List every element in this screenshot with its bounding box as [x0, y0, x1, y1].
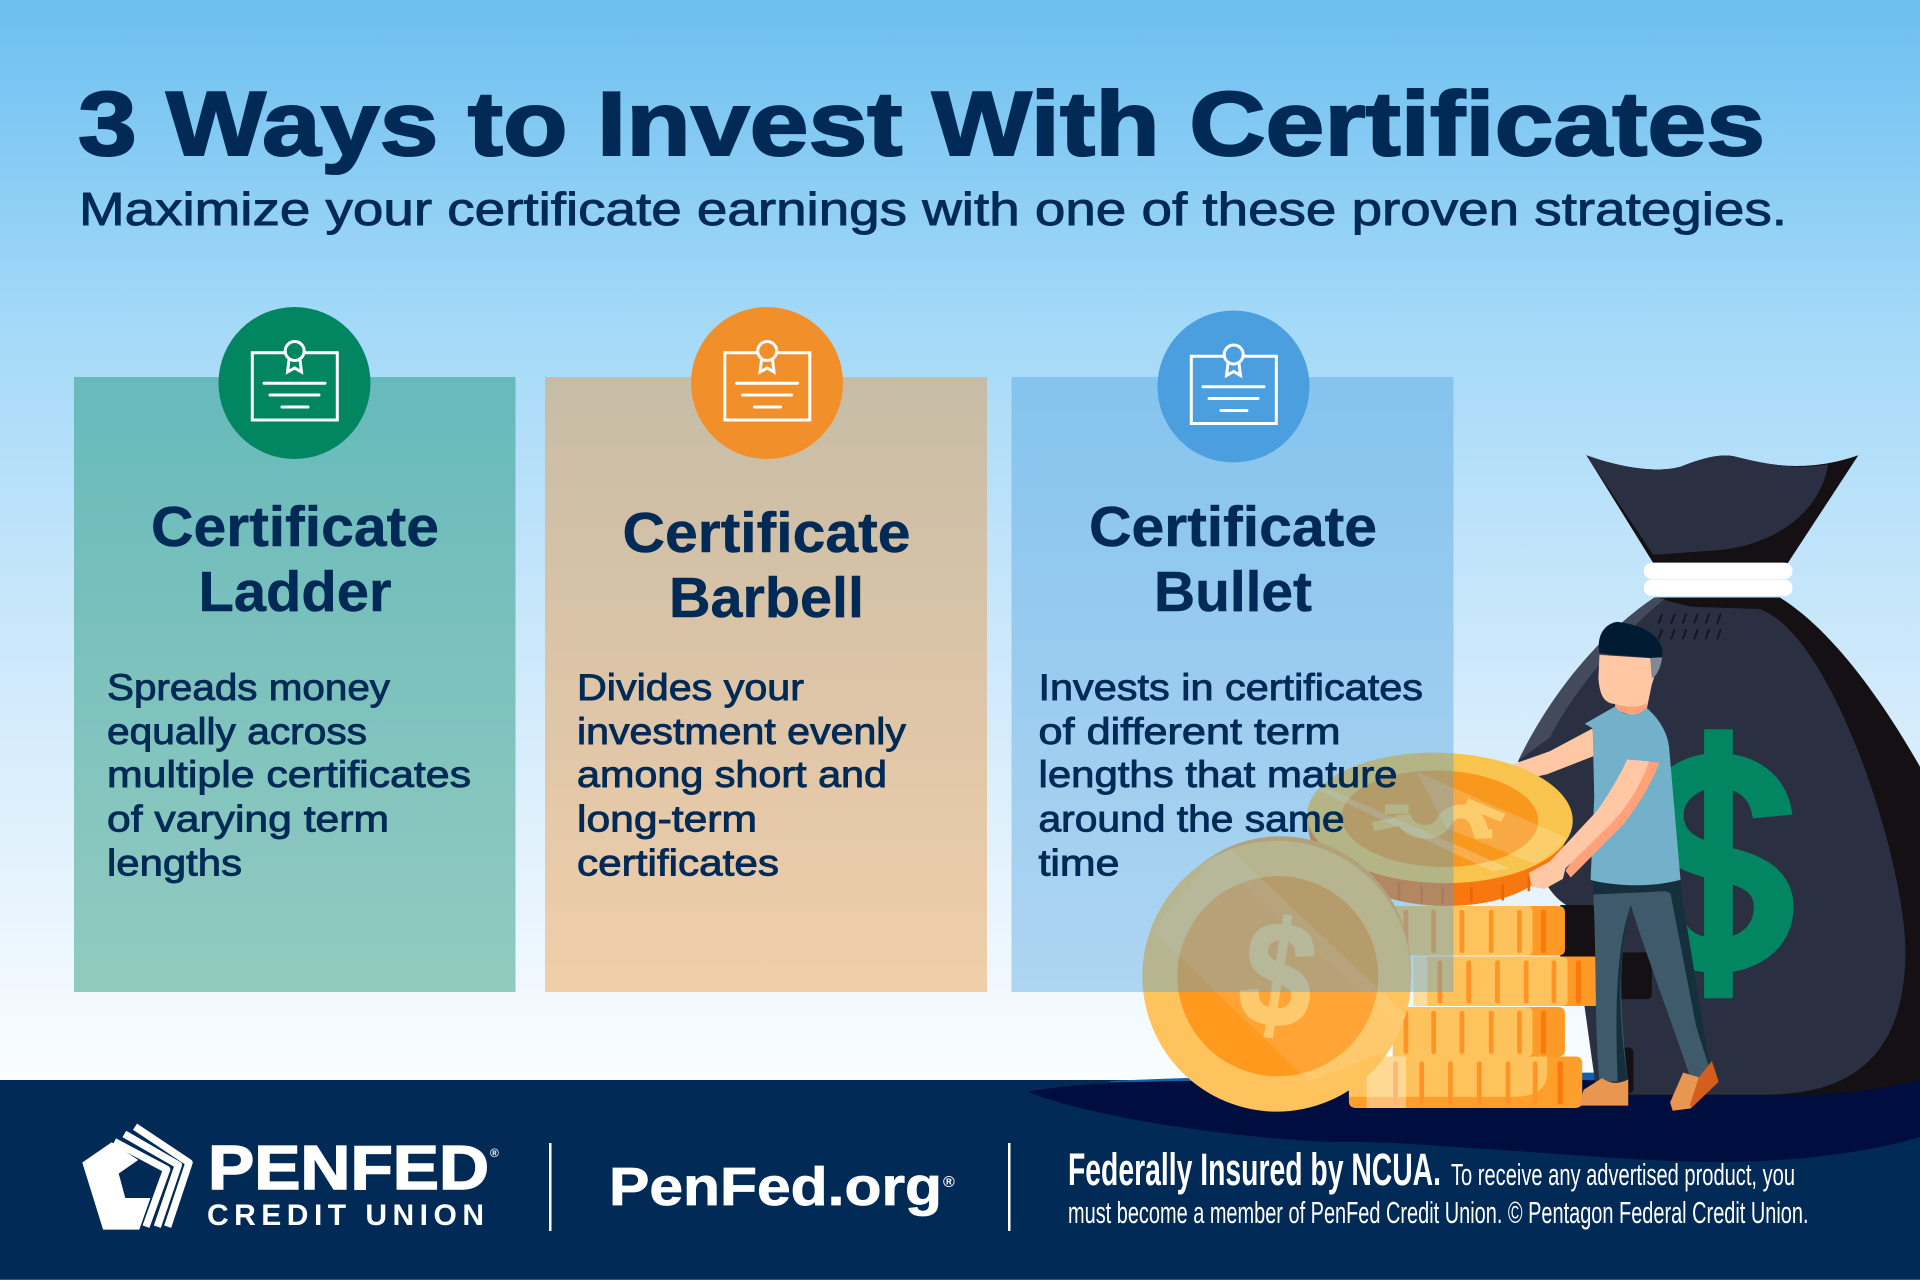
- heading: Certificate: [151, 495, 439, 559]
- panel: certificate bullet: [1012, 310, 1454, 992]
- disclosure text: [1068, 1144, 1808, 1230]
- disclosure text: Federally Insured by NCUA.: [1068, 1144, 1441, 1195]
- description: multiple certificates: [107, 754, 471, 795]
- panel: certificate ladder: [74, 307, 516, 992]
- description: time: [1038, 842, 1120, 884]
- icon: certificate blue: [1158, 310, 1310, 462]
- description: lengths that mature: [1038, 754, 1398, 795]
- heading: Bullet: [1154, 560, 1312, 624]
- heading: Barbell: [669, 566, 864, 630]
- illustration: ground shadow: [1028, 1073, 1920, 1162]
- divider: [549, 1143, 552, 1231]
- title: 3 Ways to Invest With Certificates: [78, 74, 1765, 175]
- description: Divides your: [577, 667, 804, 708]
- description: [577, 667, 907, 884]
- flat coin on top: [1305, 749, 1575, 906]
- description: around the same: [1038, 798, 1344, 840]
- logo wordmark: CREDIT UNION: [207, 1199, 484, 1232]
- description: long-term: [577, 798, 757, 840]
- description: [1038, 667, 1423, 884]
- icon: certificate orange: [691, 307, 843, 459]
- description: investment evenly: [577, 711, 907, 752]
- illustration: money, coins and person: [1142, 455, 1920, 1112]
- person: [1529, 622, 1719, 1111]
- money bag: [1518, 455, 1920, 1096]
- description: Invests in certificates: [1038, 667, 1423, 708]
- description: Spreads money: [107, 667, 391, 708]
- dollar sign on bag: [1662, 729, 1774, 998]
- heading: Certificate: [1089, 495, 1377, 559]
- flat coin dollar mark: [1373, 803, 1503, 835]
- icon: certificate green: [218, 307, 370, 459]
- heading: Certificate: [622, 501, 910, 565]
- large upright coin: [1142, 836, 1414, 1112]
- logo wordmark: PENFED: [208, 1134, 489, 1203]
- heading: [622, 501, 910, 630]
- subtitle: Maximize your certificate earnings with one of these proven strategies.: [79, 183, 1787, 235]
- logo wordmark: ®: [490, 1146, 499, 1160]
- heading: [1089, 495, 1377, 624]
- large coin dollar mark: $: [1229, 889, 1327, 1061]
- coin stack: [1349, 906, 1601, 1108]
- logo: PenFed pentagon mark: [83, 1127, 189, 1229]
- website: PenFed.org: [609, 1157, 942, 1217]
- description: equally across: [107, 711, 367, 752]
- divider: [1008, 1143, 1010, 1231]
- description: of varying term: [107, 798, 389, 840]
- description: certificates: [577, 842, 779, 884]
- description: among short and: [577, 754, 887, 795]
- person back arm: [1511, 728, 1594, 779]
- website: ®: [943, 1174, 955, 1191]
- description: of different term: [1038, 711, 1340, 752]
- logo wordmark: [207, 1134, 499, 1232]
- description: [107, 667, 471, 884]
- heading: [151, 495, 439, 624]
- heading: Ladder: [198, 560, 392, 624]
- description: lengths: [107, 842, 242, 884]
- panel: certificate barbell: [545, 307, 987, 992]
- footer band: [0, 1080, 1920, 1280]
